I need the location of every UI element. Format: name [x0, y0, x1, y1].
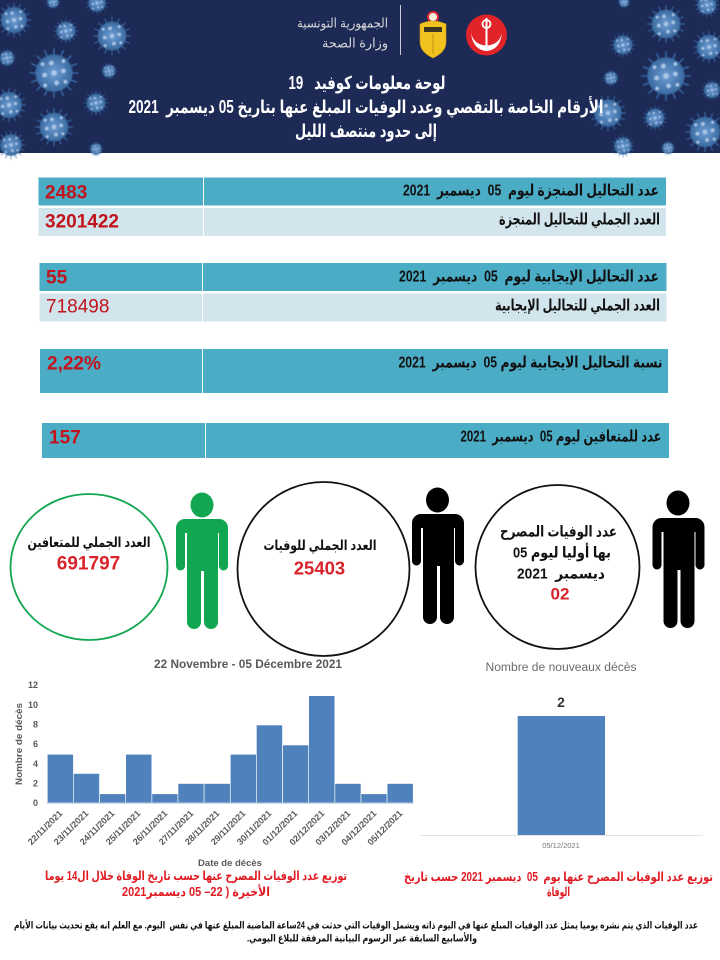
x axis dates: 04/12/2021 [339, 808, 378, 847]
x axis dates: 05/12/2021 [365, 808, 404, 847]
y axis: 2 [33, 778, 38, 788]
callout: deaths today: عدد الوفيات المصرح [500, 524, 617, 540]
footnote [14, 918, 698, 944]
x axis dates: 25/11/2021 [104, 808, 142, 847]
row: positive today: 55 [46, 268, 68, 288]
y axis [14, 680, 38, 808]
row: total positive: 718498 [46, 296, 109, 318]
chart title: 22 Novembre - 05 Décembre 2021 [154, 657, 342, 671]
row: recovered today: عدد للمتعافين ليوم 05 ديسمبر 2021 [460, 428, 662, 446]
callout: deaths today: ديسمبر 2021 [517, 566, 605, 582]
callout: total deaths: 25403 [294, 558, 345, 578]
row: total tests [38, 208, 666, 236]
title: الأرقام الخاصة بالتقصي وعدد الوفيات المبلغ عنها بتاريخ 05 ديسمبر 2021 [128, 96, 604, 118]
y axis: Nombre de décès [14, 703, 24, 785]
callout: total recovered: 691797 [57, 554, 120, 574]
bar [518, 716, 605, 835]
callout: deaths today: بها أوليا ليوم 05 [513, 542, 611, 562]
y axis: 6 [33, 739, 38, 749]
row: tests today: 2483 [45, 182, 87, 204]
row: total tests: العدد الجملي للتحاليل المنجزة [499, 212, 660, 230]
icon: health ministry logo [466, 14, 507, 56]
ministry name: الجمهورية التونسية [297, 16, 388, 32]
row: recovered today: 157 [49, 428, 81, 448]
x axis title: Date de décès [198, 858, 262, 869]
x axis dates: 03/12/2021 [313, 808, 352, 847]
x axis dates: 27/11/2021 [157, 808, 195, 847]
row: positivity rate [40, 349, 668, 393]
value label: 2 [557, 694, 565, 710]
footnote: والأسابيع السابقة عبر الرسوم البيانية المرفقة للبلاغ اليومي. [247, 932, 477, 944]
icon: green person [176, 492, 228, 629]
row: total positive: العدد الجملي للتحاليل الإيجابية [495, 298, 660, 316]
y axis: 4 [33, 759, 38, 769]
icon: national emblem [420, 12, 446, 58]
row: positivity rate: نسبة التحاليل الايجابية ليوم 05 ديسمبر 2021 [399, 354, 662, 372]
table: positive tests [40, 263, 666, 322]
x axis dates: 23/11/2021 [52, 808, 90, 847]
icon: black person [412, 488, 464, 624]
caption: left chart: الأخيرة ( 22– 05 ديسمبر2021 [122, 884, 270, 899]
row: recovered today [42, 423, 669, 458]
callout: deaths today [476, 485, 640, 649]
callout: total deaths [238, 482, 410, 656]
caption: left chart [45, 869, 347, 899]
y axis: 0 [33, 798, 38, 808]
virus decoration [0, 0, 720, 159]
x axis dates: 22/11/2021 [26, 808, 64, 847]
row: positive today: عدد التحاليل الإيجابية ليوم 05 ديسمبر 2021 [399, 268, 659, 286]
header banner [0, 0, 720, 159]
row: positive today [40, 263, 666, 291]
callout: total recovered [10, 494, 168, 640]
row: tests today [38, 178, 666, 206]
title: لوحة معلومات كوفيد 19 [289, 73, 446, 94]
x axis dates [26, 808, 404, 847]
icon: black person [652, 490, 704, 628]
date label: 05/12/2021 [542, 841, 580, 850]
row: total tests: 3201422 [45, 212, 119, 232]
title [128, 73, 604, 142]
ministry name: وزارة الصحة [322, 36, 388, 52]
x axis dates: 02/12/2021 [287, 808, 326, 847]
y axis: 12 [28, 680, 38, 690]
callout: total recovered: العدد الجملي للمتعافين [28, 534, 150, 551]
bars [47, 696, 413, 803]
chart title: Nombre de nouveaux décès [486, 662, 637, 674]
callout: total deaths: العدد الجملي للوفيات [264, 537, 376, 554]
caption: right chart [404, 870, 713, 899]
x axis dates: 30/11/2021 [235, 808, 273, 847]
row: tests today: عدد التحاليل المنجزة ليوم 05 ديسمبر 2021 [403, 182, 659, 200]
x axis dates: 24/11/2021 [78, 808, 116, 847]
x axis dates: 29/11/2021 [209, 808, 247, 847]
bar chart: new deaths [420, 662, 703, 850]
ministry name [297, 16, 388, 52]
y axis: 10 [28, 700, 38, 710]
title: إلى حدود منتصف الليل [295, 121, 437, 142]
x axis dates: 26/11/2021 [131, 808, 169, 847]
caption: right chart: الوفاة [547, 885, 570, 899]
row: positivity rate: 2,22% [47, 354, 101, 374]
caption: left chart: توزيع عدد الوفيات المصرح عنها حسب تاريخ الوفاة خلال ال14 يوما [45, 869, 347, 883]
bar chart: deaths by date [14, 657, 414, 869]
y axis: 8 [33, 720, 38, 730]
callout: deaths today: 02 [551, 584, 569, 604]
x axis dates: 28/11/2021 [183, 808, 221, 847]
x axis dates: 01/12/2021 [260, 808, 299, 847]
table: tests [38, 178, 666, 236]
row: total positive [40, 294, 666, 322]
